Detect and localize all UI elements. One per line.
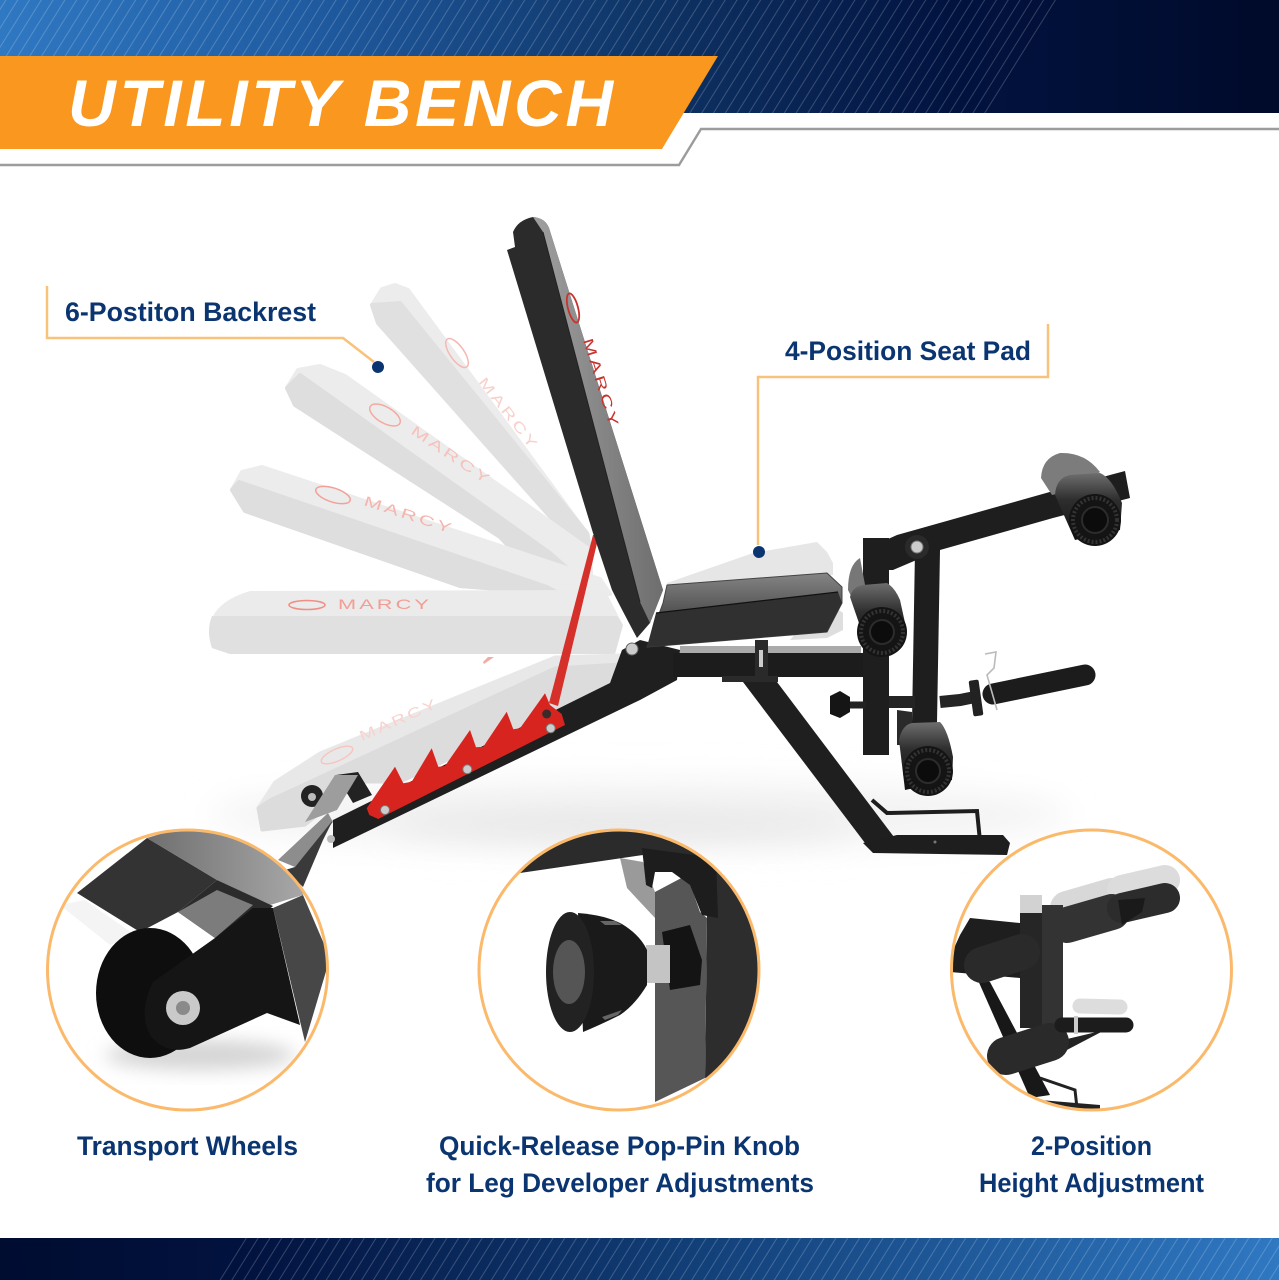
top rollers: [1041, 453, 1122, 546]
title banner: [0, 56, 718, 149]
bench illustration: [209, 217, 1130, 887]
front leg: [743, 682, 900, 845]
lever handle: [969, 652, 1085, 717]
detail circle: pop-pin knob: [479, 825, 770, 1110]
callout: 6-position backrest: 6-Postiton Backrest: [65, 297, 316, 327]
ghost seat pad: [667, 542, 843, 640]
caption: transport wheels: Transport Wheels: [77, 1131, 298, 1161]
callout: 6-position backrest: [47, 286, 384, 373]
caption: quick-release knob: Quick-Release Pop-Pin Knob: [439, 1131, 800, 1161]
detail circle: transport wheels: [48, 825, 340, 1110]
ghost backrest: steepest: MARCY: [476, 374, 542, 453]
title banner: UTILITY BENCH: [68, 66, 614, 140]
foot plate and handle: [863, 800, 1010, 855]
floor shadow: [210, 781, 1070, 849]
adjustment shaft and pop-pin knob: [830, 691, 975, 718]
header band: [0, 0, 1279, 113]
ghost backrest: mid: MARCY: [362, 493, 456, 537]
bottom roller: [899, 722, 953, 796]
middle rollers: [848, 558, 907, 657]
red support strut: [549, 535, 599, 706]
leg developer posts and arm: [863, 471, 1130, 755]
ghost backrest: high: [287, 366, 592, 590]
footer band: [0, 1238, 1279, 1280]
caption: height adjustment: Height Adjustment: [979, 1168, 1204, 1198]
ghost backrest: mid: [232, 467, 610, 594]
ghost backrest: high: MARCY: [408, 422, 495, 488]
lower rear roller: [897, 710, 912, 745]
caption: height adjustment: 2-Position: [1031, 1131, 1152, 1161]
backrest: [507, 217, 663, 638]
ghost backrest: decline: [258, 655, 623, 830]
caption: quick-release knob: [426, 1131, 814, 1198]
main frame beam: [327, 640, 680, 848]
seat pad: [647, 573, 842, 647]
horizontal seat tube: [673, 640, 863, 682]
caption: quick-release knob: for Leg Developer Adjustments: [426, 1168, 814, 1198]
ghost backrest: steepest: [372, 285, 590, 550]
header rule: [0, 129, 1279, 165]
caption: height adjustment: [979, 1131, 1204, 1198]
backrest: MARCY: [580, 336, 623, 431]
red rack plate: [367, 693, 565, 819]
callout: 4-position seat pad: 4-Position Seat Pad: [785, 336, 1031, 366]
detail circle: height adjustment: [945, 830, 1232, 1130]
rear wheel and grey frame tube: [278, 772, 372, 887]
ghost backrest: flat: MARCY: [338, 596, 432, 612]
callout: 4-position seat pad: [753, 324, 1048, 558]
ghost backrest: flat: [209, 590, 623, 654]
ghost backrest: decline: MARCY: [357, 695, 441, 744]
